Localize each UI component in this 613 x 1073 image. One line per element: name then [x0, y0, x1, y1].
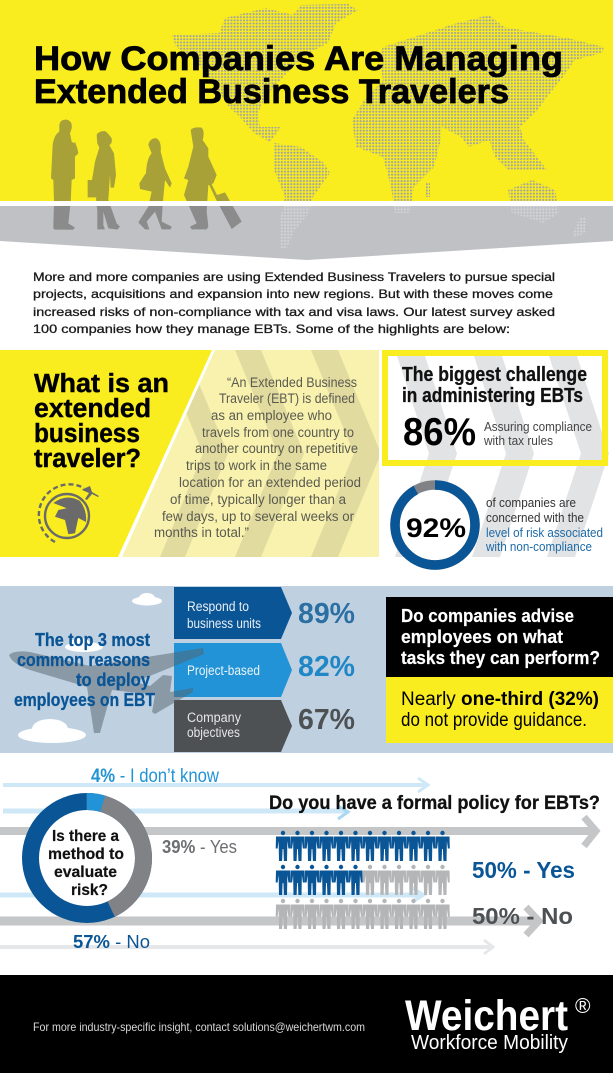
quote text: “An Extended Business: [227, 375, 357, 390]
quote text: as an employee who: [211, 408, 332, 423]
dotted world map: [172, 4, 604, 248]
panel heading: What is an: [34, 370, 169, 398]
answer: do not provide guidance.: [401, 710, 587, 731]
label: 39 percent yes: 39% - Yes: [162, 837, 237, 857]
heading: [402, 364, 587, 407]
label: 57 percent no: 57% - No: [73, 932, 150, 952]
stat caption: [483, 419, 592, 448]
title: How Companies Are Managing: [34, 40, 563, 78]
reason: project-based: Project-based: [187, 663, 260, 678]
stat caption: Assuring compliance: [484, 419, 592, 434]
question: tasks they can perform?: [401, 647, 600, 668]
quote text: trips to work in the same: [186, 458, 327, 473]
answer: [401, 689, 599, 731]
donut centre label: evaluate: [54, 864, 117, 881]
reason: respond to business units: [174, 587, 355, 639]
reason: project-based: 82%: [298, 651, 355, 683]
question: Do companies advise: [401, 605, 574, 626]
contact line: For more industry-specific insight, contact solutions@weichertwm.com: [33, 1020, 365, 1034]
panel: definition quote: [122, 350, 381, 557]
logo: Weichert: [405, 992, 568, 1040]
airplane silhouette: [9, 648, 204, 733]
label: 4 percent don't know: 4% - I don’t know: [91, 766, 219, 787]
panel: biggest challenge: [385, 350, 609, 557]
donut: 92 percent concerned: 92%: [406, 513, 466, 543]
reason: company objectives: [174, 700, 355, 752]
background arrows: [0, 778, 596, 954]
donut centre label: [48, 828, 124, 899]
heading: The biggest challenge: [402, 364, 587, 386]
quote text: travels from one country to: [202, 425, 354, 440]
logo: ®: [575, 995, 591, 1018]
donut caption: with non-compliance: [485, 540, 592, 554]
donut caption: concerned with the: [486, 511, 584, 525]
panel heading: business: [34, 420, 140, 448]
panel heading: [34, 370, 169, 473]
stat: 86 percent: 86%: [403, 411, 476, 454]
section heading: to deploy: [76, 670, 150, 690]
header banner: [0, 0, 613, 260]
reason: respond to business units: business units: [187, 616, 261, 631]
question: [401, 605, 600, 668]
reason: respond to business units: 89%: [298, 598, 355, 630]
donut caption: level of risk associated: [486, 526, 603, 540]
intro paragraph: increased risks of non-compliance with tax and visa laws. Our latest survey asked: [33, 305, 555, 319]
donut centre label: Is there a: [52, 828, 119, 845]
donut: 92 percent concerned: [391, 481, 479, 569]
quote text: another country on repetitive: [195, 441, 358, 456]
background chevrons: [395, 350, 609, 557]
quote text: location for an extended period: [179, 475, 361, 490]
reason: company objectives: objectives: [187, 725, 240, 740]
donut centre label: method to: [48, 846, 124, 863]
pictogram: people: [276, 831, 450, 929]
intro paragraph: 100 companies how they manage EBTs. Some of the highlights are below:: [33, 322, 510, 336]
grey ground arrow band: [0, 206, 613, 260]
reason: respond to business units: Respond to: [187, 599, 249, 614]
donut caption: [485, 496, 603, 554]
label: 50 percent yes: 50% - Yes: [472, 857, 575, 883]
logo: Workforce Mobility: [411, 1032, 568, 1054]
intro paragraph: projects, acquisitions and expansion into new regions. But with these moves come: [33, 287, 553, 301]
donut chart: method to evaluate risk: [30, 802, 144, 914]
heading: in administering EBTs: [402, 385, 583, 407]
quote text: months in total.”: [154, 525, 249, 540]
reason: company objectives: 67%: [298, 704, 355, 736]
section heading: employees on EBT: [14, 690, 155, 710]
reason: company objectives: Company: [187, 710, 241, 725]
panel: top 3 reasons: [0, 586, 613, 753]
answer: Nearly one-third (32%): [401, 689, 599, 710]
panel: do companies advise employees: [386, 597, 613, 743]
section heading: common reasons: [17, 650, 150, 670]
title: Extended Business Travelers: [34, 73, 509, 111]
title: [34, 40, 563, 111]
silhouettes of four travelers: [51, 120, 242, 230]
section heading: [14, 630, 155, 710]
label: 50 percent no: 50% - No: [472, 903, 573, 929]
quote text: few days, up to several weeks or: [162, 509, 354, 524]
icon: globe with plane: [39, 484, 99, 542]
footer: [0, 975, 613, 1073]
stat caption: with tax rules: [483, 433, 553, 448]
question: employees on what: [401, 626, 563, 647]
section heading: The top 3 most: [35, 630, 150, 650]
quote text: of time, typically longer than a: [170, 492, 346, 507]
intro paragraph: [33, 270, 555, 336]
panel heading: traveler?: [34, 445, 141, 473]
intro paragraph: More and more companies are using Extended Business Travelers to pursue special: [33, 270, 555, 284]
quote text: [154, 375, 361, 540]
panel heading: extended: [34, 395, 151, 423]
donut caption: of companies are: [486, 496, 576, 510]
clouds: [18, 593, 162, 743]
quote text: Traveler (EBT) is defined: [219, 391, 355, 406]
panel: what is an extended business traveler: [0, 350, 381, 557]
reason: project-based: [174, 643, 355, 697]
donut centre label: risk?: [71, 882, 108, 899]
